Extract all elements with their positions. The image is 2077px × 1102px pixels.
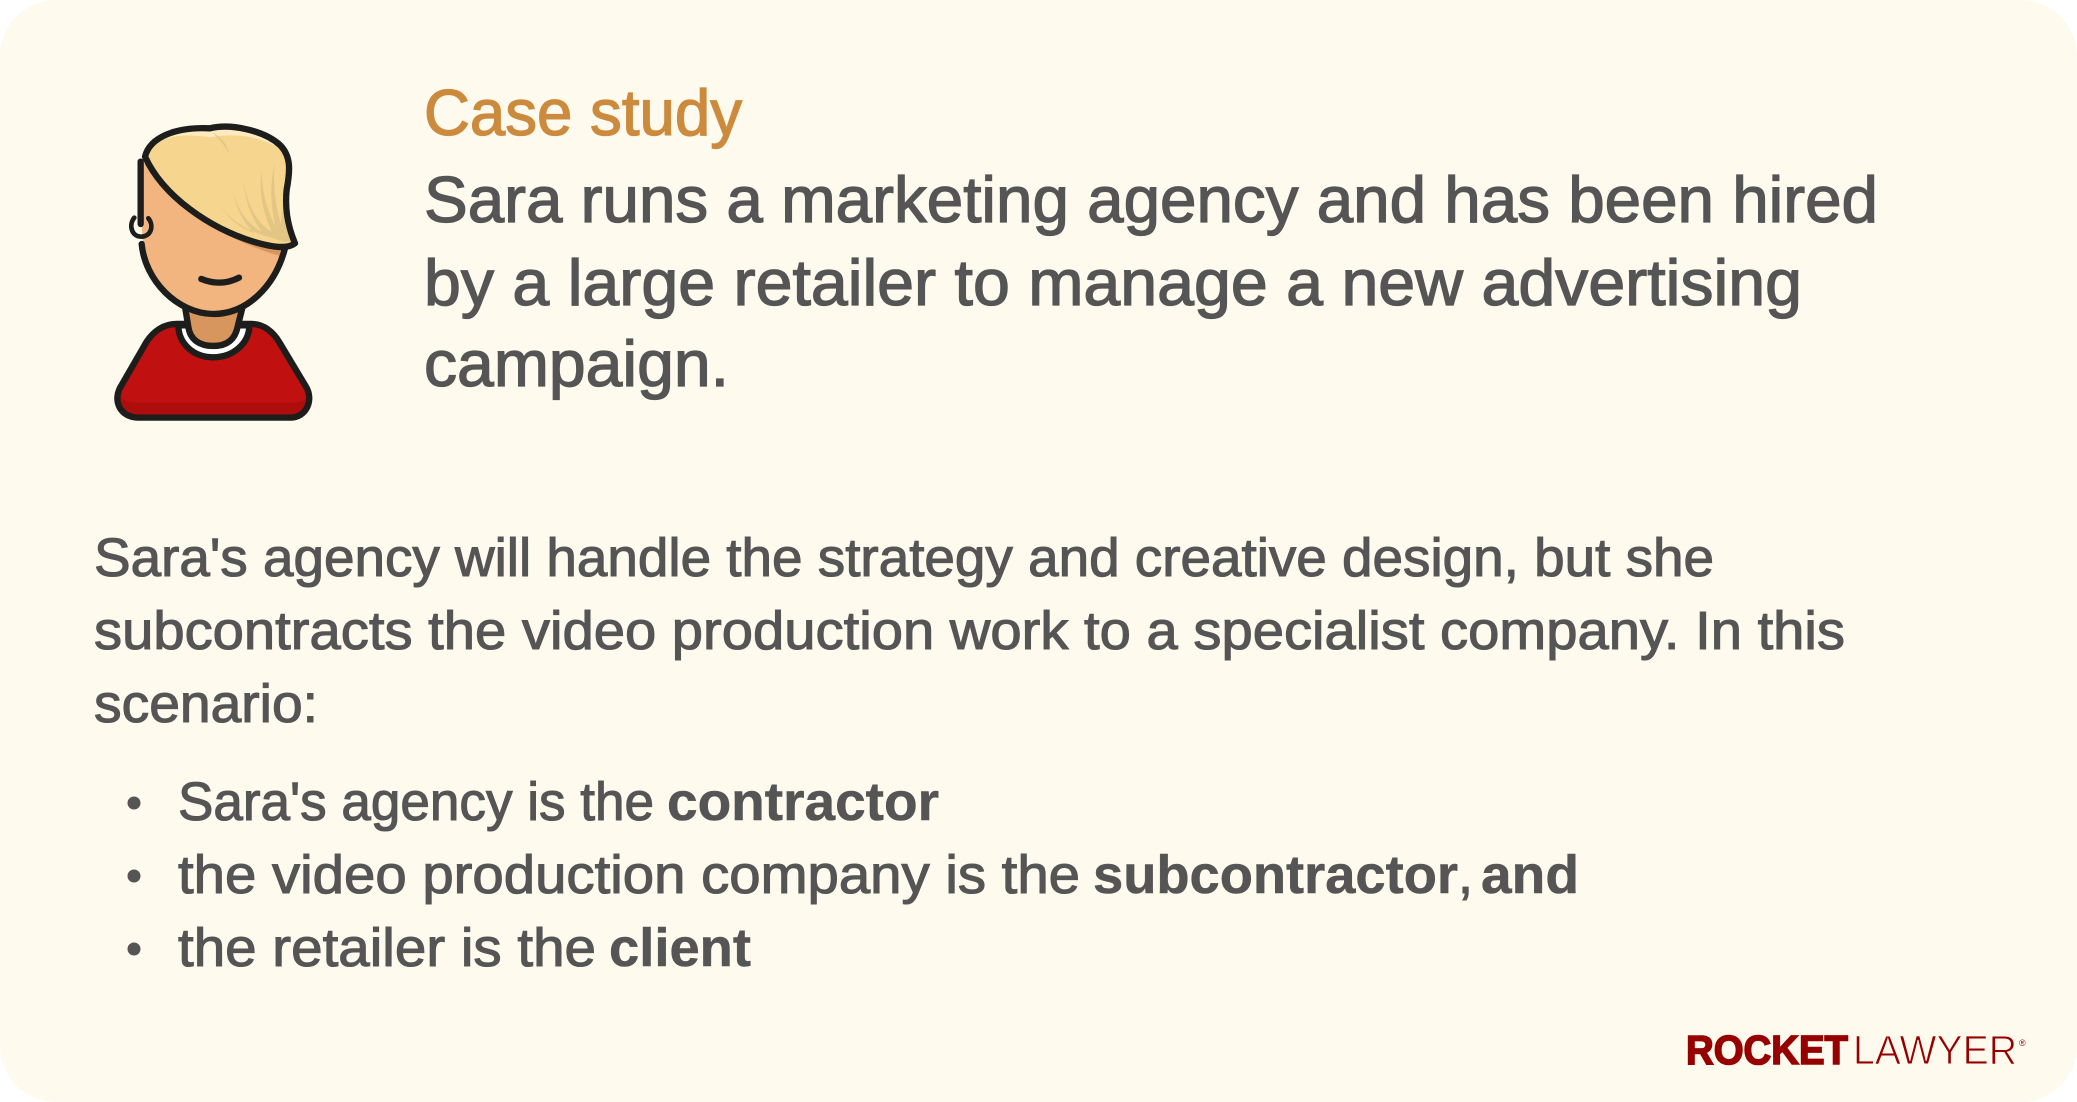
list: roles: subcontractor	[1093, 845, 1458, 905]
heading: case study: Case study	[424, 76, 742, 149]
list: roles: the retailer is the	[178, 918, 596, 978]
list: roles: and	[1481, 845, 1579, 905]
text block: scenario: Sara's agency will handle the strategy and creative design, but she	[94, 528, 1714, 588]
text block: intro: campaign.	[424, 327, 729, 400]
list: roles: client	[609, 918, 751, 978]
list: roles	[128, 772, 1579, 978]
text block: intro: Sara runs a marketing agency and has been hired	[424, 163, 1878, 236]
list: roles: ,	[1458, 845, 1473, 905]
list: roles: Sara's agency is the	[178, 772, 654, 832]
logo: Rocket Lawyer: ROCKET	[1686, 1027, 1848, 1073]
list: roles: contractor	[667, 772, 939, 832]
text block: scenario	[94, 528, 1845, 734]
text block: intro: by a large retailer to manage a new advertising	[424, 246, 1802, 319]
logo: Rocket Lawyer: ®	[2019, 1038, 2026, 1048]
text block: scenario: subcontracts the video production work to a specialist company. In this	[94, 601, 1845, 661]
text block: intro	[424, 163, 1878, 400]
logo: Rocket Lawyer	[1686, 1027, 2026, 1073]
icon: Sara avatar	[117, 127, 309, 418]
list: roles: the video production company is the	[178, 845, 1080, 905]
text block: scenario: scenario:	[94, 674, 318, 734]
logo: Rocket Lawyer: LAWYER	[1853, 1027, 2017, 1073]
